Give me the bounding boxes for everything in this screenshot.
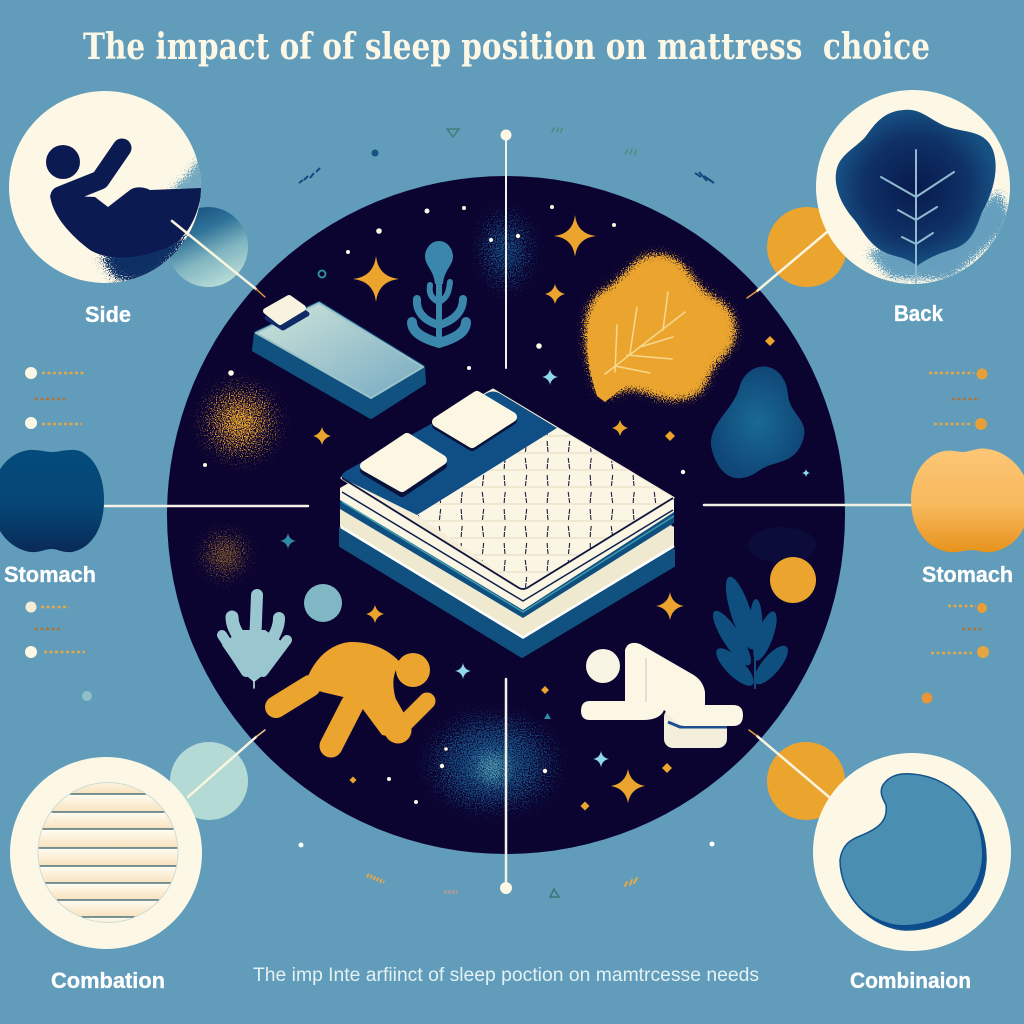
pillow shadow left [365,442,442,492]
satellite circle: top-left [168,207,248,287]
legend: left lower [25,602,92,701]
arm [60,148,122,196]
pillow right [437,396,512,443]
label: combinaion: Combinaion [850,968,971,993]
orange leaf [585,254,736,402]
thin dark line [342,492,673,601]
icon panel: back sleeper leaf [816,90,1012,284]
base layer [340,440,674,657]
icon panel: combination blob [813,753,1011,951]
central dark circle [167,176,845,854]
label: combation: Combation [51,968,165,993]
foam layer [340,420,674,637]
grain edge right [160,150,201,194]
glow: left orange [190,372,290,472]
grain edge bottom [100,230,190,285]
stomach blob: right [911,449,1024,552]
connector: bottom-left [188,730,265,797]
white layer [340,395,674,610]
sparkles and specks [203,205,810,810]
foam highlight [341,527,674,638]
stomach blob: left [0,450,104,552]
legend: left upper [25,367,86,429]
glow: left brown [191,521,259,589]
connector: top-right [747,232,827,298]
blue blob [711,367,804,478]
icon panel: combination stripes [10,757,202,949]
small mattress [254,298,424,417]
plant: dark blue [707,574,793,691]
head [46,145,80,179]
legend: right lower [922,603,989,704]
stripe lines [38,794,178,917]
glow: top centre blue [468,196,544,304]
glow: bottom blue [412,701,572,825]
orange circle right [770,557,816,603]
blue stripe [340,400,674,618]
legend: right upper [929,368,988,430]
satellite circle: bottom-left [170,742,248,820]
pillow left [365,438,442,487]
quilted surface [417,428,673,589]
glow: right faint [748,527,816,563]
white person [581,643,743,748]
label: stomach left: Stomach [4,562,96,587]
top edge line [342,478,673,589]
body [50,187,202,258]
teal circle left [304,584,342,622]
label: stomach right: Stomach [922,562,1013,587]
pillow shadow right [437,399,512,446]
satellite circle: top-right [767,207,847,287]
teal highlight [342,502,674,612]
caption: The imp Inte arfiinct of sleep poction on mamtrcesse needs [253,965,759,986]
connector: bottom-right [749,730,829,797]
top layer [342,390,673,590]
connector: top-left [172,221,265,297]
label: side: Side [85,302,131,327]
stripe bands [38,776,178,927]
plant: blue-teal [412,241,466,343]
blue head panel [342,392,557,515]
grain edge [865,190,1012,280]
decorative marks outside the circle [298,128,714,897]
main mattress [340,390,674,657]
plant: pale teal [222,595,287,688]
label: back: Back [894,301,944,326]
orange person [276,642,430,746]
satellite circle: bottom-right [767,742,845,820]
connector lines [105,130,912,894]
leaf veins [881,150,954,283]
leaf blob [836,110,996,266]
icon panel: side sleeper [9,91,212,285]
